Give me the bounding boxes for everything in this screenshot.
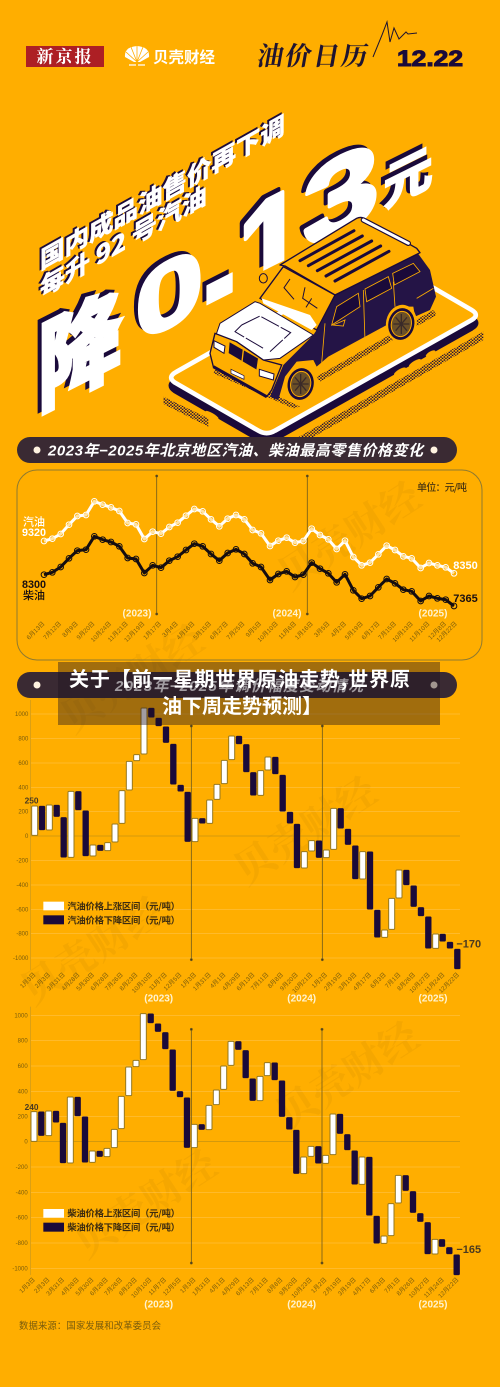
- diesel line: [44, 536, 454, 606]
- legend: 汽油价格下降区间（元/吨）: [67, 912, 180, 926]
- series labels: 7365: [453, 593, 478, 605]
- x axis labels: 4月2日: [330, 620, 348, 639]
- roof rack: [363, 220, 408, 243]
- x axis labels: 4月28日: [60, 1276, 81, 1297]
- year dividers: [156, 475, 308, 615]
- y axis labels: 0: [25, 834, 29, 840]
- series labels: 汽油: [23, 514, 45, 530]
- x axis labels: 8月9日: [61, 620, 80, 639]
- overlay title banner: [58, 662, 440, 725]
- title: 油价日历 with pulse line: 油价日历: [255, 36, 371, 73]
- x axis labels: 2月19日: [322, 1276, 343, 1297]
- year labels: diesel: (2023): [144, 1300, 173, 1310]
- x axis labels: 12月22日: [437, 1276, 460, 1300]
- x axis labels: 8月26日: [395, 1276, 416, 1297]
- x axis labels: 6月27日: [209, 620, 230, 641]
- x axis labels: 12月8日: [427, 620, 448, 641]
- watermarks: 贝壳财经: [61, 1133, 227, 1269]
- section heading pill: price change: 2023年−2025年北京地区汽油、柴油最高零售价格变化: [47, 442, 425, 460]
- big number: 降 0-13 元: 1: [238, 155, 304, 328]
- logo: 贝壳财经: 贝壳财经: [153, 46, 215, 68]
- legend: 汽油价格上涨区间（元/吨）: [67, 898, 180, 912]
- x axis labels: 8月23日: [118, 1276, 139, 1297]
- x axis labels: 5月15日: [192, 620, 213, 641]
- x axis labels: [19, 971, 461, 995]
- hood: [216, 302, 313, 360]
- y axis labels: 600: [18, 1064, 28, 1070]
- x axis labels: 9月20日: [278, 1276, 299, 1297]
- y axis labels: -1000: [12, 1266, 28, 1272]
- y axis labels: 400: [18, 1089, 28, 1095]
- x axis labels: 2月3日: [33, 1276, 51, 1295]
- year labels: (2024): [273, 608, 301, 620]
- year labels: gasoline: [144, 994, 447, 1004]
- y axis labels: [12, 1013, 28, 1272]
- date: 12.22: [397, 46, 463, 71]
- unit: 单位：元/吨: [417, 479, 467, 494]
- x axis labels: 5月30日: [75, 971, 96, 992]
- y axis labels: 1000: [14, 1013, 28, 1019]
- y axis labels: -400: [16, 883, 29, 889]
- x axis labels: 9月5日: [245, 620, 263, 639]
- x axis labels: 10月10日: [256, 620, 280, 644]
- x axis labels: 10月21日: [291, 971, 314, 995]
- x axis labels: 10月13日: [391, 620, 415, 644]
- grid: [31, 700, 460, 970]
- x axis labels: 5月30日: [74, 1276, 95, 1297]
- side windows and door lines: [322, 263, 433, 363]
- value labels: [25, 1102, 481, 1256]
- legend: 柴油价格上涨区间（元/吨）: [67, 1206, 180, 1220]
- x axis labels: 8月23日: [118, 971, 139, 992]
- x axis labels: 10月27日: [408, 1276, 431, 1300]
- big number: 降 0-13 元: 元: [383, 125, 433, 223]
- x axis labels: 6月13日: [25, 620, 46, 641]
- windshield: [260, 267, 335, 330]
- x axis labels: 6月13日: [235, 971, 256, 992]
- year labels: diesel: [144, 1300, 447, 1310]
- x axis labels: 11月6日: [277, 620, 298, 641]
- big number: 降 0-13 元: [38, 143, 432, 417]
- x axis labels: 4月29日: [220, 1276, 241, 1297]
- x axis labels: 11月7日: [147, 1276, 168, 1297]
- value labels: −165: [456, 1244, 481, 1256]
- bars: [31, 1014, 460, 1275]
- series labels: 8350: [453, 560, 478, 572]
- year labels: diesel: (2024): [287, 1300, 316, 1310]
- year labels: (2025): [419, 608, 447, 620]
- waterfall chart: diesel: [12, 1007, 481, 1300]
- x axis labels: 4月17日: [352, 971, 373, 992]
- legend: 柴油价格下降区间（元/吨）: [67, 1220, 180, 1234]
- overlay title banner: 油下周走势预测】: [162, 690, 322, 719]
- x axis labels: 12月19日: [123, 620, 146, 644]
- x axis labels: 1月17日: [142, 620, 163, 641]
- x axis labels: 11月21日: [107, 620, 130, 643]
- x axis labels: 2月19日: [323, 971, 344, 992]
- y axis labels: 800: [18, 1039, 28, 1045]
- x axis labels: 7月26日: [103, 1276, 124, 1297]
- year dividers: [190, 1028, 323, 1264]
- year labels: gasoline: (2025): [419, 994, 447, 1004]
- bars: [32, 708, 460, 969]
- x axis labels: 7月1日: [383, 1276, 402, 1295]
- wheels: [282, 302, 420, 405]
- x axis labels: 8月8日: [266, 1276, 284, 1295]
- y axis labels: -400: [16, 1190, 28, 1196]
- x axis labels: 10月10日: [131, 971, 154, 995]
- value labels: 240: [25, 1102, 39, 1112]
- y axis labels: 0: [24, 1140, 28, 1146]
- year labels: (2023): [123, 608, 151, 620]
- series labels: 8300: [22, 579, 46, 591]
- x axis labels: [18, 1276, 460, 1300]
- section heading pill: adjustment range: 2023年−2025年调价幅度变动情况: [114, 678, 365, 695]
- x axis labels: 1月31日: [192, 971, 213, 992]
- overlay title banner: 关于【前一星期世界原油走势,世界原: [69, 663, 410, 692]
- x axis labels: 7月11日: [249, 1276, 270, 1297]
- heading: 国内成品油售价再下调: 每升 92 号汽油: [40, 174, 207, 305]
- x axis labels: 7月1日: [384, 971, 402, 990]
- x axis labels: 10月23日: [290, 1276, 314, 1300]
- series labels: 柴油: [23, 587, 45, 603]
- x axis labels: 3月31日: [45, 1276, 66, 1297]
- watermarks: 贝壳财经: [263, 1005, 429, 1141]
- car body side: [270, 252, 436, 400]
- y axis labels: 800: [18, 736, 29, 742]
- x axis labels: 1月3日: [19, 971, 37, 990]
- section heading pill: adjustment range: [17, 672, 457, 698]
- x axis labels: 9月20日: [75, 620, 96, 641]
- x axis labels: 4月16日: [175, 620, 196, 641]
- gasoline line: [44, 501, 454, 573]
- title: 油价日历 with pulse line: [255, 22, 417, 73]
- source note: 数据来源：国家发展和改革委员会: [19, 1318, 162, 1332]
- y axis labels: [13, 712, 29, 962]
- x axis labels: 12月22日: [438, 971, 461, 995]
- value labels: 250: [25, 796, 39, 806]
- x axis labels: 12月5日: [162, 971, 183, 992]
- x axis labels: 11月24日: [423, 1276, 446, 1299]
- legend: [43, 898, 180, 926]
- y axis labels: 400: [18, 785, 29, 791]
- x axis labels: 6月3日: [369, 1276, 387, 1295]
- x axis labels: 1月3日: [179, 1276, 197, 1295]
- illustration: phone: [163, 259, 483, 448]
- year dividers: [190, 725, 323, 961]
- x axis labels: 6月28日: [89, 1276, 110, 1297]
- x axis labels: 1月31日: [191, 1276, 212, 1297]
- grid: [31, 1007, 460, 1275]
- x axis labels: 3月19日: [337, 1276, 358, 1297]
- x axis labels: 7月12日: [42, 620, 63, 641]
- logo: 贝壳财经: [125, 46, 215, 68]
- x axis labels: 1月2日: [311, 971, 329, 990]
- watermarks: [8, 465, 431, 1269]
- x axis labels: 9月20日: [279, 971, 300, 992]
- series labels: 9320: [22, 527, 46, 539]
- x axis labels: 8月26日: [396, 971, 417, 992]
- value labels: [25, 796, 481, 950]
- x axis labels: 10月10日: [130, 1276, 153, 1300]
- x axis labels: [25, 620, 459, 644]
- y axis labels: 200: [18, 810, 29, 816]
- x axis labels: 4月29日: [221, 971, 242, 992]
- roof slats: [300, 231, 389, 281]
- heading: 国内成品油售价再下调: 国内成品油售价再下调: [40, 104, 285, 277]
- x axis labels: 10月24日: [90, 620, 113, 644]
- watermarks: 贝壳财经: [48, 608, 214, 744]
- y axis labels: -200: [16, 858, 29, 864]
- mirror: [259, 274, 267, 283]
- x axis labels: 6月17日: [360, 620, 381, 641]
- x axis labels: 1月3日: [180, 971, 198, 990]
- y axis labels: -800: [16, 1241, 28, 1247]
- car roof: [280, 217, 420, 295]
- x axis labels: 3月5日: [313, 620, 331, 639]
- y axis labels: 600: [18, 761, 29, 767]
- x axis labels: 1月3日: [18, 1276, 37, 1295]
- section heading pill: price change: [17, 437, 457, 463]
- panel: line chart: [17, 470, 482, 660]
- x axis labels: 7月26日: [104, 971, 125, 992]
- headline: [38, 104, 433, 438]
- x axis labels: 11月7日: [148, 971, 169, 992]
- x axis labels: 4月1日: [208, 1276, 227, 1295]
- big number: 降 0-13 元: -: [203, 178, 236, 371]
- series labels: [22, 514, 478, 605]
- x axis labels: 6月28日: [89, 971, 110, 992]
- x axis labels: 8月8日: [267, 971, 285, 990]
- big number: 降 0-13 元: 0: [135, 225, 204, 365]
- watermarks: 贝壳财经: [8, 880, 174, 1016]
- watermarks: 贝壳财经: [265, 465, 431, 601]
- legend: [43, 1206, 180, 1234]
- x axis labels: 10月27日: [408, 971, 432, 995]
- year labels: [123, 608, 447, 620]
- waterfall chart: gasoline: [13, 700, 481, 995]
- y axis labels: -800: [16, 932, 29, 938]
- x axis labels: 12月5日: [162, 1276, 183, 1297]
- illustration: car: [210, 217, 436, 405]
- x axis labels: 7月15日: [377, 620, 398, 641]
- x axis labels: 7月25日: [225, 620, 246, 641]
- y axis labels: 200: [18, 1114, 28, 1120]
- x axis labels: 4月28日: [60, 971, 81, 992]
- x axis labels: 1月16日: [294, 620, 315, 641]
- x axis labels: 3月4日: [161, 620, 180, 639]
- big number: 降 0-13 元: 降: [38, 250, 123, 438]
- year labels: gasoline: (2023): [144, 994, 173, 1004]
- x axis labels: 7月11日: [250, 971, 270, 992]
- y axis labels: -200: [16, 1165, 28, 1171]
- x axis labels: 3月31日: [46, 971, 67, 992]
- front fascia: [210, 333, 282, 397]
- year labels: diesel: (2025): [419, 1300, 447, 1310]
- y axis labels: -1000: [13, 956, 29, 962]
- big number: 降 0-13 元: 3: [303, 115, 379, 276]
- x axis labels: 4月17日: [351, 1276, 372, 1297]
- x axis labels: 11月10日: [408, 620, 431, 643]
- x axis labels: 11月24日: [423, 971, 446, 994]
- x axis labels: 2月3日: [34, 971, 52, 990]
- y axis labels: -600: [16, 907, 29, 913]
- y axis labels: -600: [16, 1216, 28, 1222]
- watermarks: 贝壳财经: [221, 760, 387, 896]
- x axis labels: 6月3日: [369, 971, 388, 990]
- x axis labels: 12月22日: [435, 620, 459, 644]
- x axis labels: 1月2日: [310, 1276, 328, 1295]
- value labels: −170: [456, 938, 481, 950]
- x axis labels: 4月1日: [209, 971, 227, 990]
- x axis labels: 3月19日: [337, 971, 358, 992]
- year labels: gasoline: (2024): [287, 994, 316, 1004]
- logo: 新京报: 新京报: [36, 42, 94, 68]
- y axis labels: 1000: [15, 712, 29, 718]
- x axis labels: 6月13日: [235, 1276, 256, 1297]
- x axis labels: 5月19日: [344, 620, 365, 641]
